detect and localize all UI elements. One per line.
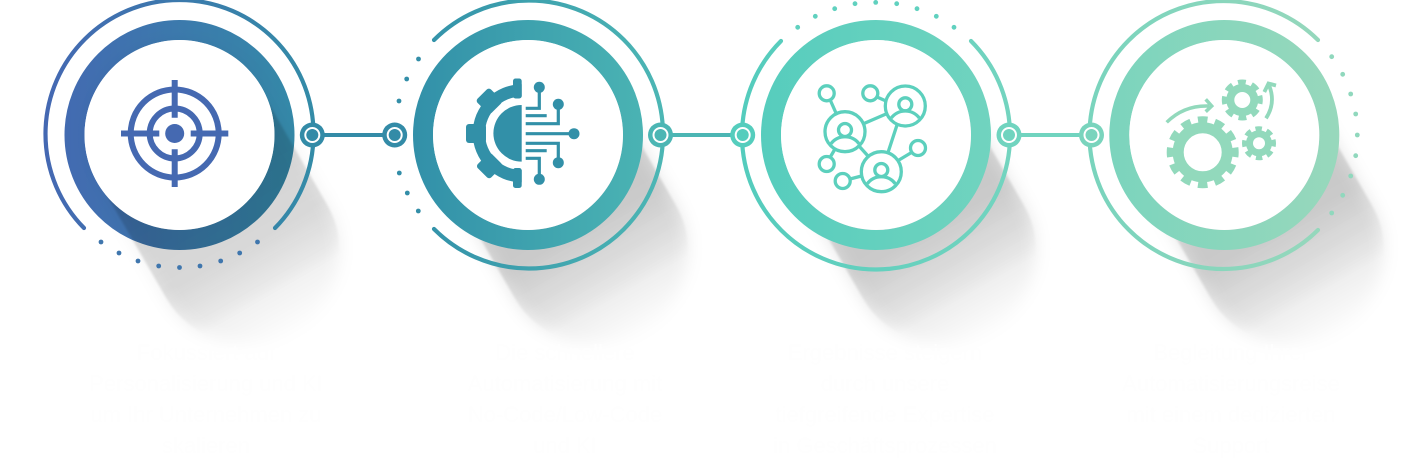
connector: step 2 to step 3 [660, 133, 743, 137]
icon: half gear with circuit [466, 78, 580, 188]
ring shadow [52, 8, 374, 378]
text block: step 1: skalieren [162, 433, 250, 458]
icon: gears with arrows [1167, 82, 1276, 184]
dotted arc [1329, 54, 1360, 215]
node: step 3 left [730, 122, 755, 148]
icon: target crosshair [121, 80, 228, 187]
text block: step 4: Begleitung Ihrer [1153, 340, 1309, 365]
text block: step 4: mit einem dedizierten [1126, 402, 1336, 427]
node: step 2 right [648, 122, 673, 148]
text block: step 4: Automatisierungsreise [1122, 371, 1340, 396]
node: step 2 left [382, 122, 407, 148]
outer arc [1089, 1, 1318, 269]
text block: step 1: Personalisierung und KI [89, 371, 323, 396]
text block: step 3: Ergebnisse steigern [788, 340, 982, 365]
icon: people network [819, 86, 926, 192]
node: step 3 right [996, 122, 1022, 148]
shadow: step 2 [401, 8, 722, 378]
dotted arc [397, 57, 421, 213]
text block: step 1: Fokussiert auf [137, 340, 276, 365]
text block: step 1: um Ihr Unternehmen zu [90, 402, 322, 427]
panel: step 4 gears [1089, 1, 1360, 269]
dotted arc [795, 0, 956, 30]
panel: step 2 gear and circuit [397, 0, 663, 269]
text block: step 2: Automatisierung mit [468, 371, 662, 396]
white disc [781, 40, 971, 230]
text block: step 2: und KI [533, 433, 597, 458]
thick ring [1119, 30, 1329, 240]
shadow: step 4 [1097, 8, 1418, 378]
outer arc [46, 0, 314, 228]
connector: step 1 to step 2 [312, 133, 395, 137]
text block: step 3: in Geschäftsprozessen [773, 433, 997, 458]
node: step 4 left [1079, 122, 1104, 148]
thick ring [771, 30, 981, 240]
thick ring [423, 30, 633, 240]
text block: step 4: Support [1192, 433, 1270, 458]
text block: step 3: tiefgreifende Expertise [776, 402, 994, 427]
text block: step 2: Die schnellere [495, 340, 635, 365]
text block: step 2: No-Code/Low-Code [468, 402, 662, 427]
shadow: step 3 [749, 8, 1070, 378]
panel: step 3 network [742, 0, 1010, 270]
white disc [433, 40, 623, 230]
outer arc [742, 41, 1010, 270]
outer arc [434, 0, 663, 269]
white disc [84, 40, 274, 230]
connector: step 3 to step 4 [1009, 133, 1091, 137]
node: step 1 right [300, 122, 325, 148]
text block: step 3: durch unsere [821, 371, 949, 396]
white disc [1129, 40, 1319, 230]
panel: step 1 target [46, 0, 374, 378]
thick ring [74, 30, 284, 240]
dotted arc [99, 240, 260, 270]
